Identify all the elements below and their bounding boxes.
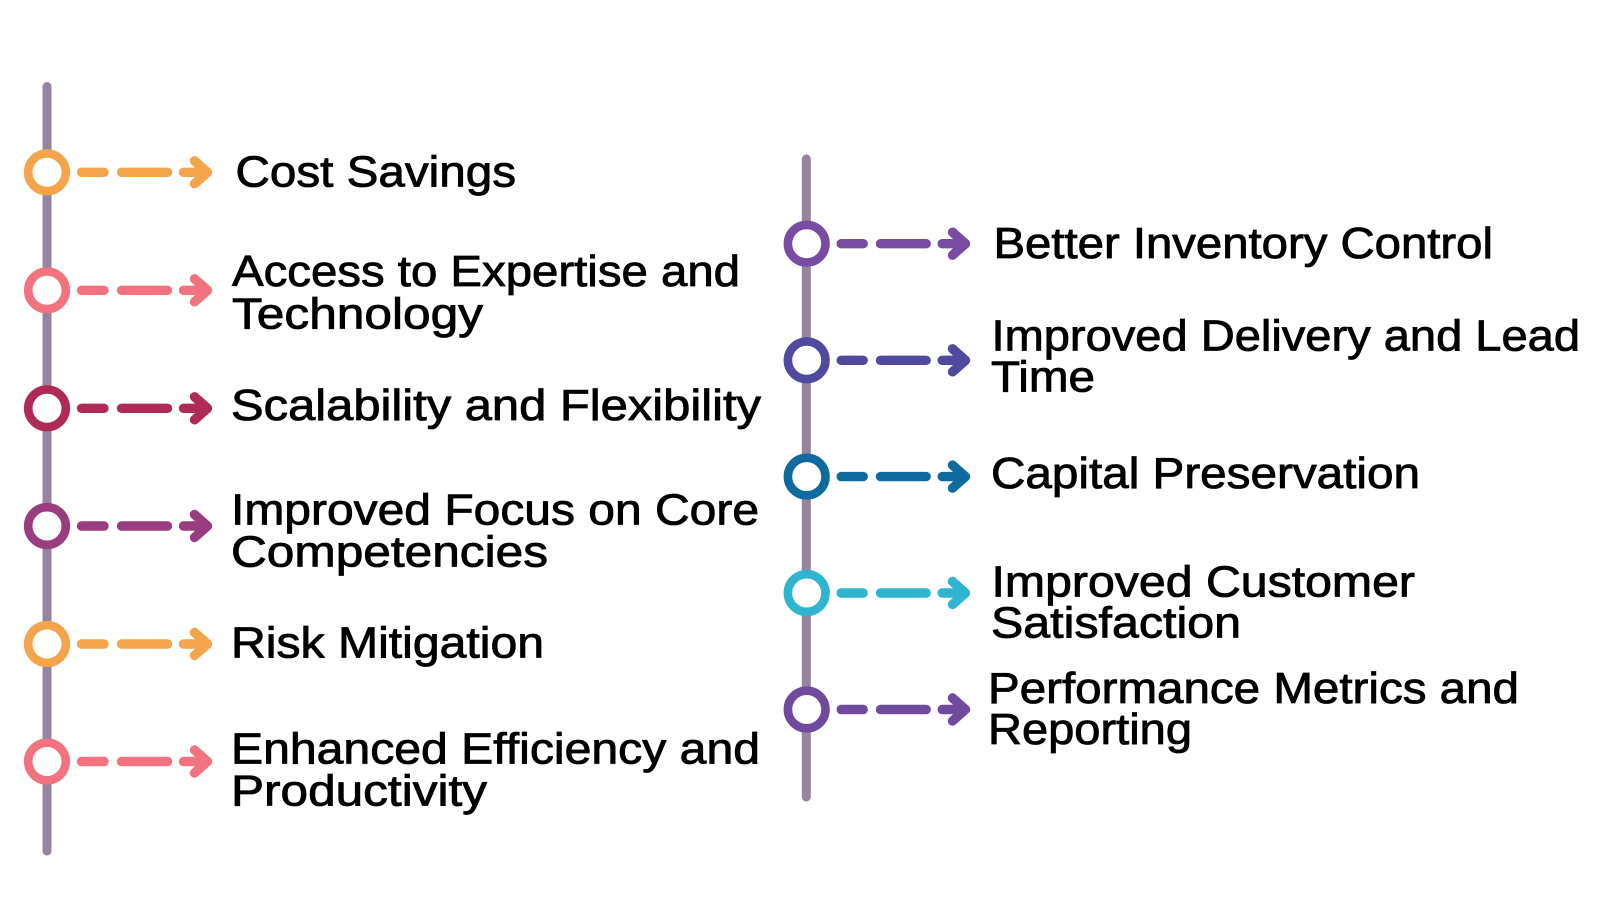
label: Performance Metrics and Reporting: Reporting xyxy=(988,705,1192,754)
marker and arrow: crimson xyxy=(28,390,208,427)
item: Improved Delivery and Lead Time xyxy=(788,312,1580,402)
label: Enhanced Efficiency and Productivity xyxy=(231,724,760,816)
marker and arrow: orange xyxy=(28,154,208,191)
label: Capital Preservation: Capital Preservation xyxy=(991,449,1420,498)
label: Improved Delivery and Lead Time: Time xyxy=(991,352,1095,402)
label: Improved Delivery and Lead Time xyxy=(991,312,1580,402)
item: Enhanced Efficiency and Productivity xyxy=(28,724,760,816)
marker and arrow: indigo xyxy=(788,342,966,379)
marker and arrow: magenta xyxy=(28,507,208,545)
label: Improved Customer Satisfaction xyxy=(991,558,1415,648)
label: Improved Focus on Core Competencies: Improved Focus on Core xyxy=(231,486,759,534)
item: Risk Mitigation xyxy=(28,618,544,668)
item: Improved Customer Satisfaction xyxy=(788,558,1415,648)
marker and arrow: pink xyxy=(28,743,208,780)
item: Performance Metrics and Reporting xyxy=(788,664,1519,754)
item: Better Inventory Control xyxy=(788,219,1493,268)
item: Capital Preservation xyxy=(788,449,1420,498)
marker and arrow: purple xyxy=(788,691,966,728)
marker and arrow: cyan xyxy=(788,574,966,612)
item: Access to Expertise and Technology xyxy=(28,247,740,338)
label: Access to Expertise and Technology xyxy=(232,247,740,338)
marker and arrow: teal blue xyxy=(788,458,966,495)
label: Access to Expertise and Technology: Access to Expertise and xyxy=(232,247,740,296)
right timeline line xyxy=(802,159,811,797)
label: Performance Metrics and Reporting: Performance Metrics and xyxy=(988,664,1519,713)
label: Enhanced Efficiency and Productivity: Enhanced Efficiency and xyxy=(231,724,760,774)
item: Cost Savings xyxy=(28,148,516,196)
label: Performance Metrics and Reporting xyxy=(988,664,1519,754)
label: Improved Delivery and Lead Time: Improved Delivery and Lead xyxy=(992,312,1580,360)
item: Scalability and Flexibility xyxy=(28,381,761,430)
marker and arrow: pink xyxy=(28,272,208,309)
label: Scalability and Flexibility: Scalability and Flexibility xyxy=(231,381,761,430)
label: Risk Mitigation: Risk Mitigation xyxy=(231,618,544,668)
label: Cost Savings: Cost Savings xyxy=(236,148,516,196)
label: Access to Expertise and Technology: Technology xyxy=(232,290,483,338)
label: Improved Focus on Core Competencies xyxy=(231,486,759,576)
marker and arrow: orange xyxy=(28,625,208,663)
left timeline line xyxy=(42,86,52,851)
label: Improved Customer Satisfaction: Improved Customer xyxy=(992,558,1415,606)
label: Improved Focus on Core Competencies: Competencies xyxy=(231,528,548,576)
label: Better Inventory Control: Better Inventory Control xyxy=(994,219,1493,268)
label: Improved Customer Satisfaction: Satisfaction xyxy=(991,598,1241,648)
item: Improved Focus on Core Competencies xyxy=(28,486,759,576)
marker and arrow: violet xyxy=(788,225,966,262)
label: Enhanced Efficiency and Productivity: Productivity xyxy=(231,766,487,816)
